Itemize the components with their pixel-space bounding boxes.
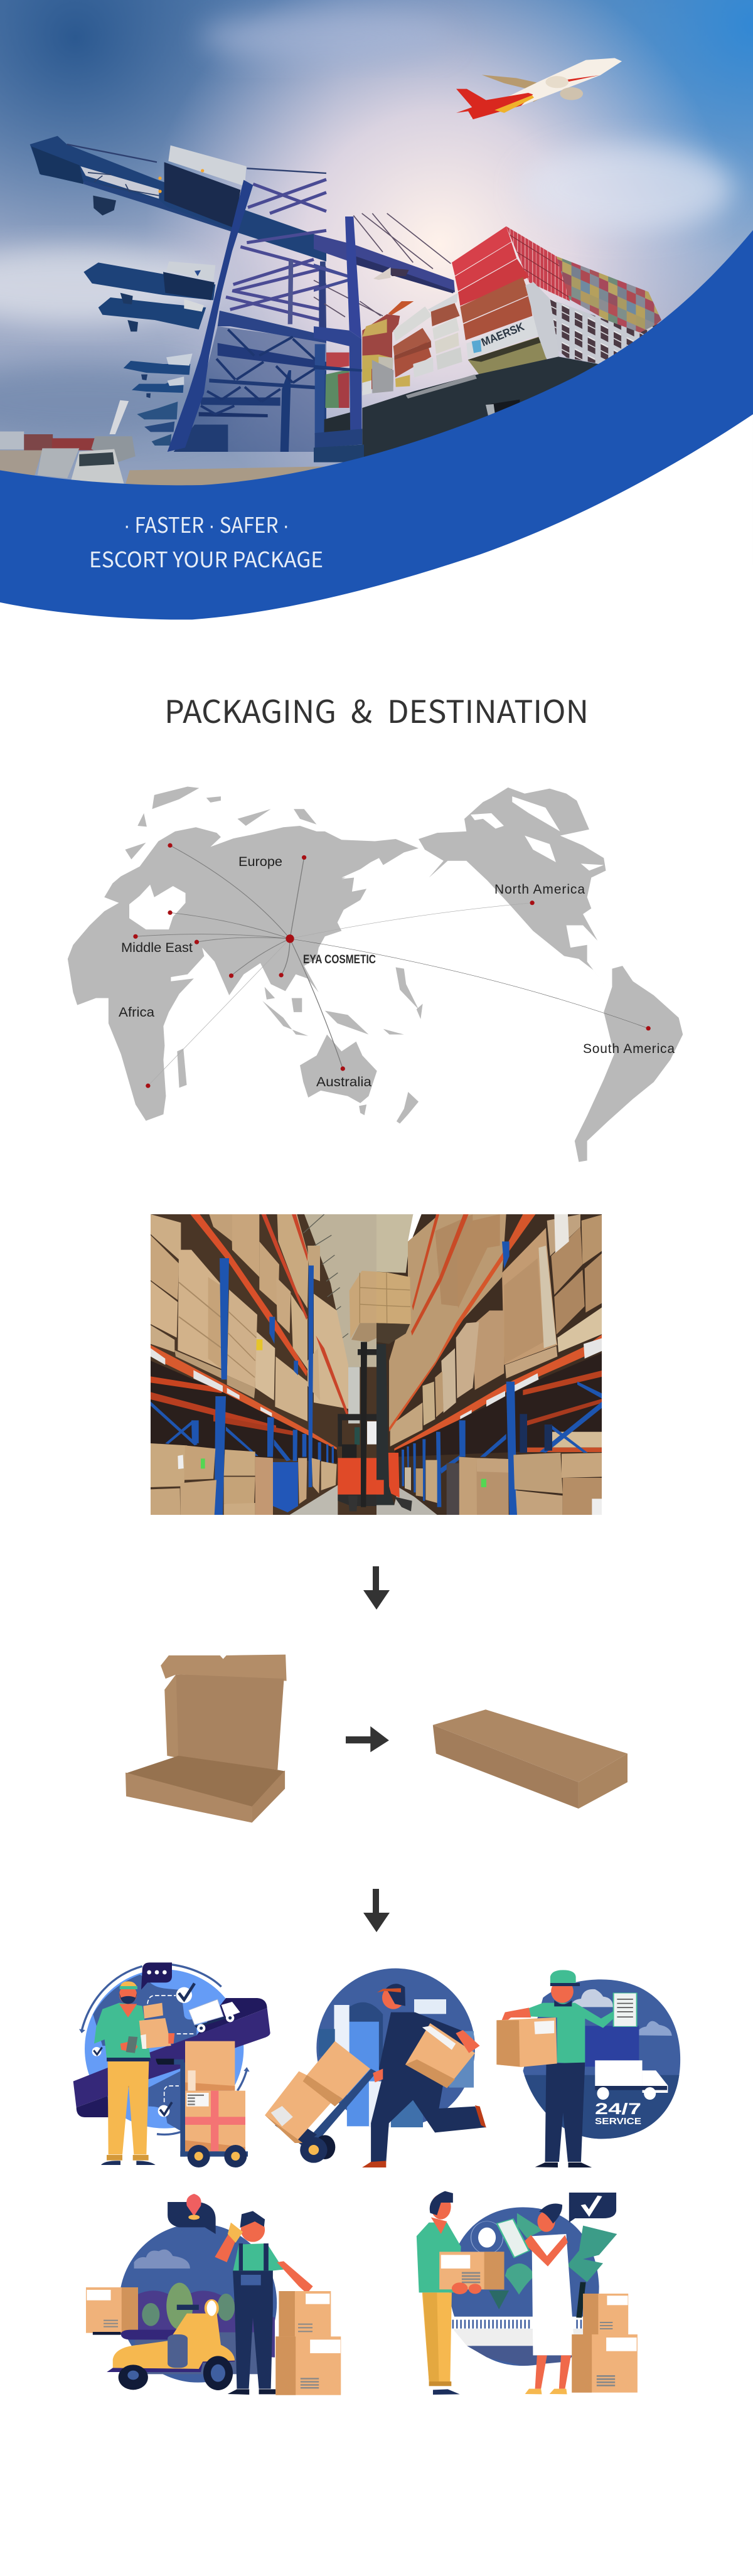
airplane (456, 58, 622, 119)
brown containers (460, 277, 532, 340)
open carton (125, 1655, 287, 1823)
purple band (196, 1998, 267, 2035)
north america (419, 788, 606, 984)
warehouse photo (151, 1214, 604, 1515)
service label: SERVICE (595, 2116, 641, 2127)
crane lower infill (178, 326, 326, 452)
crane portal frame (168, 180, 326, 452)
maersk lettering: MAERSK (479, 320, 526, 349)
illustration: courier with clipboard and truck (496, 1970, 680, 2167)
mid crane booms (83, 262, 215, 331)
section title: DESTINATION (387, 687, 589, 732)
container wall receding (506, 227, 661, 339)
banner tagline: escort your package: ESCORT YOUR PACKAGE (89, 543, 323, 574)
orange beams (389, 1214, 535, 1432)
distant container stacks (325, 293, 462, 408)
south america (575, 966, 683, 1162)
map label: australia: Australia (316, 1075, 371, 1089)
arrow: warehouse to box (363, 1566, 390, 1610)
front crane boom (30, 136, 326, 262)
ship hull (324, 356, 601, 461)
trolley and boxes (156, 2059, 174, 2065)
crane cross bracing (201, 329, 320, 414)
ship superstructure (525, 282, 661, 364)
orange beams (190, 1214, 307, 1376)
ceiling (376, 1214, 413, 1273)
cartons (151, 1443, 187, 1487)
map label: europe: Europe (238, 855, 282, 869)
illustration: running courier with hand truck (265, 1969, 486, 2167)
yellow lower containers (468, 337, 547, 375)
globe (85, 1969, 243, 2129)
map label: eya cosmetic: EYA COSMETIC (303, 953, 376, 966)
floor cartons (459, 1457, 477, 1515)
blue curved band and white page below (0, 230, 753, 640)
afro-eurasia (68, 826, 419, 1121)
route lines and dots (133, 843, 651, 1088)
24/7 label: 24/7 (595, 2100, 641, 2118)
arrow right (346, 1726, 389, 1752)
maersk container (466, 316, 539, 359)
carried parcels (143, 2003, 163, 2019)
islands (125, 786, 423, 1123)
world map (68, 786, 683, 1162)
far crane booms (124, 353, 193, 446)
closed carton (433, 1709, 628, 1809)
truck (189, 1999, 223, 2025)
forklift load and mast (350, 1271, 378, 1339)
crane lattice diagonals (226, 179, 326, 320)
uprights (402, 1241, 604, 1515)
map label: south america: South America (583, 1042, 675, 1056)
section title (164, 687, 589, 732)
motion arcs (82, 1965, 247, 2134)
chat bubble (141, 1962, 172, 1990)
foreground crane leg (314, 213, 455, 462)
floor (290, 1485, 338, 1515)
warehouse left half (151, 1214, 378, 1515)
red containers (452, 227, 529, 306)
ceiling (304, 1214, 378, 1367)
hero banner (0, 0, 753, 565)
banner tagline: faster safer: · FASTER · SAFER · (124, 508, 289, 539)
illustration: courier with scooter (86, 2194, 341, 2395)
sky background (0, 0, 753, 565)
forklift load and mast (376, 1272, 411, 1324)
port cranes (30, 136, 326, 452)
container ship (314, 213, 661, 462)
arrow: carton to delivery (363, 1889, 390, 1932)
floor (376, 1487, 437, 1515)
upper cartons (389, 1214, 506, 1430)
blue uprights and braces (151, 1258, 334, 1515)
under-deck area (394, 1352, 604, 1457)
inland water (129, 796, 604, 929)
courier (94, 2003, 151, 2058)
section title: PACKAGING (164, 687, 336, 732)
illustration: courier with parcels and trolley (73, 1962, 270, 2167)
map label: north america: North America (494, 882, 585, 897)
illustration: courier handing parcel to customer (417, 2191, 638, 2395)
delivery route and checks (147, 1996, 196, 2102)
australia (300, 1035, 377, 1103)
section title: & (351, 687, 372, 732)
warehouse right half (376, 1214, 604, 1515)
under-deck area (151, 1360, 338, 1463)
map label: middle east: Middle East (121, 941, 193, 955)
far boxes (277, 1214, 309, 1308)
map landmasses (68, 786, 683, 1162)
map label: africa: Africa (119, 1005, 154, 1020)
port yard and trucks (0, 400, 336, 486)
